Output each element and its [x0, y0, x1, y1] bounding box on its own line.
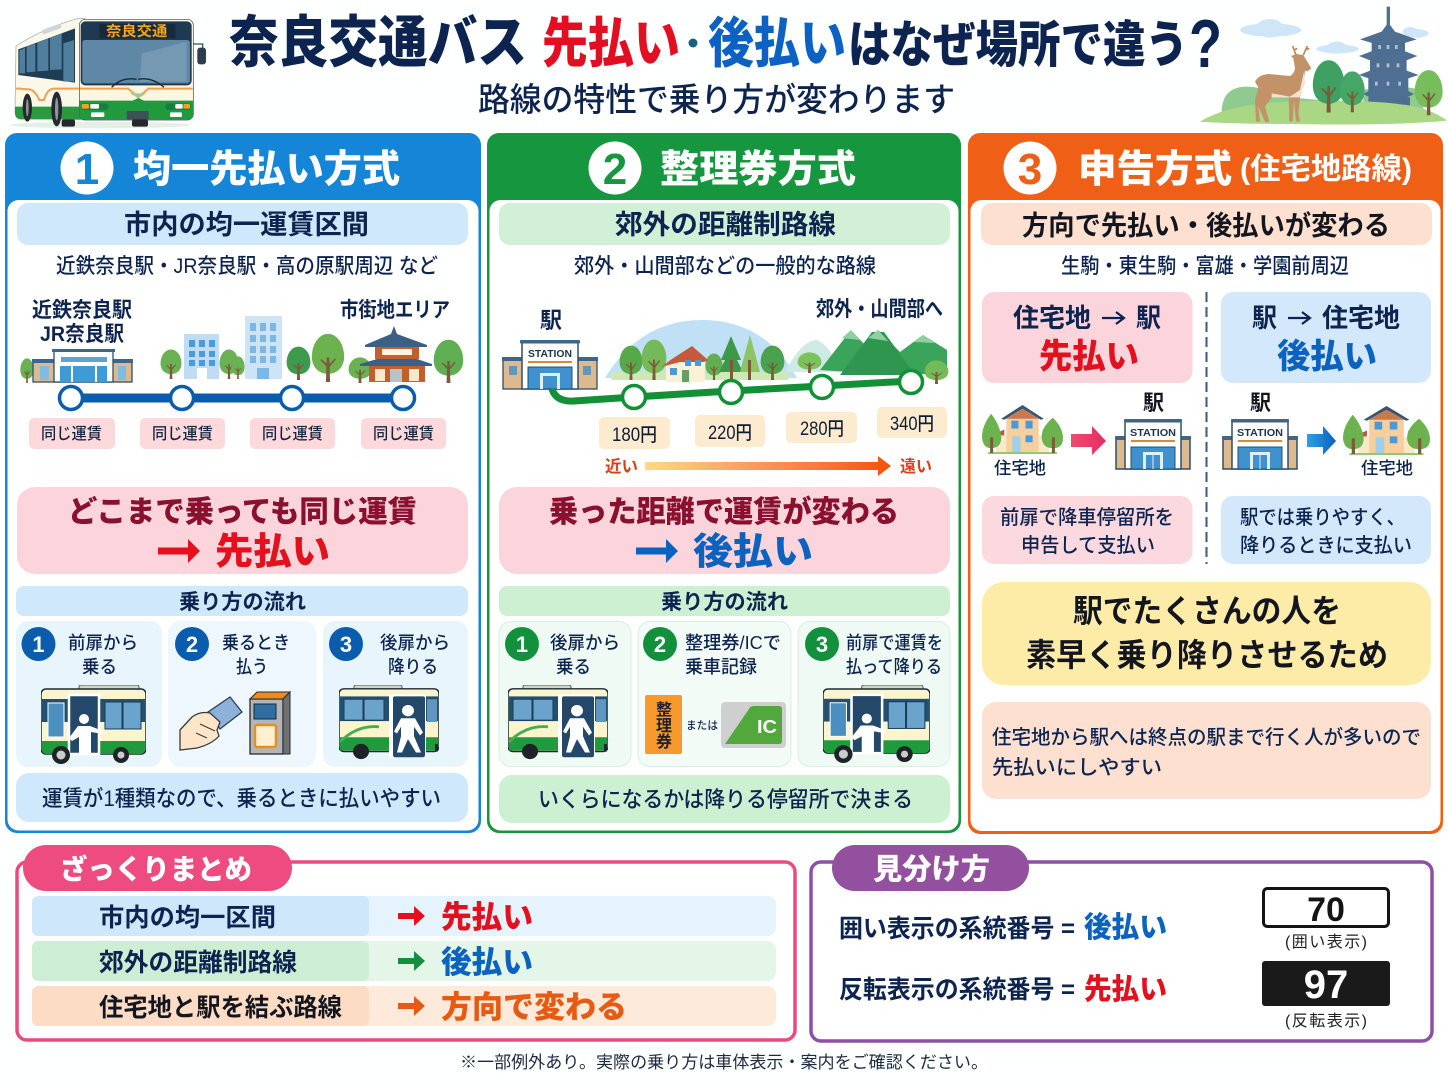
direction box: station to residential: 駅 — [1252, 303, 1277, 333]
panel 2 note — [499, 775, 950, 823]
explanation: pay when getting off — [1221, 496, 1431, 564]
sign: 70 outlined — [1264, 888, 1388, 951]
panel 2 frame and header — [487, 133, 961, 833]
panel 2 heading: 整理券方式 — [660, 149, 856, 191]
fare tags: 280円 — [800, 419, 844, 440]
panel 3 subheading: 方向で先払い・後払いが変わる — [1022, 210, 1390, 241]
step 2-2 record boarding with ticket or IC: 券 — [656, 733, 672, 751]
summary frame — [17, 862, 795, 1040]
panel 3 frame and header — [968, 133, 1443, 834]
direction box: residential to station: 先払い — [1039, 338, 1139, 376]
distance gradient arrow — [605, 456, 932, 476]
title: はなぜ場所で違う — [848, 17, 1188, 73]
panel 1 locations: 近鉄奈良駅・JR奈良駅・高の原駅周辺 など — [56, 254, 438, 278]
sign: 97 inverted: (反転表示) — [1285, 1012, 1367, 1030]
panel 3: declaration system — [968, 133, 1443, 834]
panel 1 station label — [32, 299, 132, 346]
step 1-1 board at front door: 1 — [32, 632, 45, 657]
sign: 70 outlined: 70 — [1307, 891, 1345, 929]
panel 1 frame and header — [5, 133, 481, 833]
illustration: station and city — [20, 316, 463, 383]
illustration: house to station: 駅 — [1143, 392, 1164, 415]
illustration: station to house: 住宅地 — [1361, 459, 1413, 478]
route line with fare stops — [552, 370, 922, 408]
sign: 97 inverted: 97 — [1304, 963, 1348, 1007]
panel 1 flow heading — [16, 586, 468, 616]
direction box: residential to station — [982, 292, 1192, 383]
illustration: house to station — [982, 392, 1191, 478]
panel 1: uniform prepayment — [5, 133, 481, 833]
panel 2 subheading — [499, 203, 950, 245]
panel 2 conclusion callout: 乗った距離で運賃が変わる — [549, 495, 899, 529]
panel 2: numbered ticket — [487, 133, 961, 833]
fare tags — [599, 407, 947, 449]
summary tab: ざっくりまとめ — [60, 853, 252, 885]
distance gradient arrow: 近い — [605, 457, 638, 476]
step 2-1 board at rear door: 後扉から — [550, 633, 620, 653]
explanation: pay when getting off: 駅では乗りやすく、 — [1240, 506, 1405, 529]
panel 3 subheading — [981, 203, 1432, 245]
step 2-2 record boarding with ticket or IC: 理 — [656, 718, 672, 735]
step 2-3 pay at front door and exit: 3 — [816, 632, 828, 657]
panel 3 yellow callout: 素早く乗り降りさせるため — [1026, 637, 1388, 673]
how to tell tab — [832, 845, 1029, 891]
summary row: suburban — [32, 941, 776, 981]
panel 2 subheading: 郊外の距離制路線 — [615, 210, 836, 240]
same fare tags: 同じ運賃 — [41, 425, 102, 443]
panel 1 station label: 近鉄奈良駅 — [32, 299, 132, 322]
step 2-2 record boarding with ticket or IC — [638, 622, 791, 766]
panel 2 locations: 郊外・山間部などの一般的な路線 — [574, 255, 876, 278]
step 1-1 board at front door — [16, 621, 162, 767]
panel 1 station label: JR奈良駅 — [40, 323, 124, 346]
fare tags: 220円 — [708, 423, 752, 444]
illustration: station — [502, 340, 598, 389]
panel 3 locations: 生駒・東生駒・富雄・学園前周辺 — [1061, 255, 1349, 278]
panel 1 heading: 均一先払い方式 — [133, 149, 400, 191]
step 1-3 exit at rear door: 後扉から — [380, 633, 450, 653]
same fare tags: 同じ運賃 — [152, 425, 213, 443]
illustration: station to house: 駅 — [1250, 392, 1271, 415]
panel 1 note — [16, 773, 468, 822]
summary row: residential: 方向で変わる — [441, 990, 627, 1025]
panel 1 flow heading: 乗り方の流れ — [179, 591, 306, 614]
panel 3 number badge — [1004, 142, 1056, 194]
illustration: station to house — [1222, 392, 1430, 478]
panel 1 number badge: 1 — [75, 145, 99, 194]
direction box: station to residential: 後払い — [1277, 338, 1377, 376]
same fare tags: 同じ運賃 — [373, 425, 434, 443]
how to tell panel — [811, 845, 1432, 1041]
illustration: house to station: STATION — [1130, 428, 1176, 439]
panel 1 conclusion callout — [17, 487, 468, 574]
summary row: city uniform: 先払い — [441, 900, 533, 935]
panel 1 body — [8, 200, 478, 830]
summary row: suburban: 郊外の距離制路線 — [99, 949, 297, 977]
panel 2 conclusion callout: 後払い — [693, 531, 813, 572]
panel 3 body — [970, 200, 1440, 831]
summary row: suburban: 後払い — [441, 945, 533, 980]
footnote: ※一部例外あり。実際の乗り方は車体表示・案内をご確認ください。 — [460, 1053, 988, 1072]
explanation: pay when getting off: 降りるときに支払い — [1240, 534, 1412, 557]
step 2-1 board at rear door — [499, 622, 631, 766]
step 2-2 record boarding with ticket or IC: IC — [757, 717, 777, 737]
step 1-2 pay when boarding: 2 — [186, 632, 198, 657]
header illustration: deer, pagoda and trees — [1200, 7, 1447, 125]
title — [229, 6, 1222, 82]
explanation: pay by declaring stop: 前扉で降車停留所を — [1000, 506, 1174, 529]
panel 1 city label: 市街地エリア — [340, 299, 450, 322]
direction box: station to residential: 住宅地 — [1322, 303, 1400, 333]
step 1-1 board at front door: 前扉から — [68, 633, 138, 653]
route line with stops — [60, 386, 414, 410]
panel 3 heading — [1078, 149, 1412, 191]
step 2-2 record boarding with ticket or IC: 整理券/ICで — [685, 633, 781, 653]
panel 2 number badge: 2 — [603, 145, 627, 194]
dashed divider — [1206, 292, 1208, 564]
panel 1 note: 運賃が1種類なので、乗るときに払いやすい — [42, 786, 441, 811]
explanation: pay by declaring stop: 申告して支払い — [1021, 534, 1155, 557]
rule: inverted number: 反転表示の系統番号 = — [839, 976, 1075, 1004]
direction box: residential to station: 駅 — [1136, 303, 1161, 333]
step 2-2 record boarding with ticket or IC: 2 — [654, 632, 666, 657]
panel 2 note: いくらになるかは降りる停留所で決まる — [538, 787, 913, 812]
panel 2 number badge — [588, 142, 642, 194]
summary panel — [17, 845, 795, 1040]
panel 2 conclusion callout — [499, 487, 950, 574]
fare tags: 340円 — [890, 414, 934, 435]
panel 3 number badge: 3 — [1018, 145, 1042, 194]
panel 2 flow heading: 乗り方の流れ — [661, 591, 788, 614]
same fare tags: 同じ運賃 — [262, 425, 323, 443]
title: 先払い — [542, 14, 680, 74]
step 2-3 pay at front door and exit: 払って降りる — [846, 657, 942, 677]
rule: inverted number: 先払い — [1084, 973, 1167, 1006]
direction box: residential to station: 住宅地 — [1013, 303, 1091, 333]
panel 1 conclusion callout: どこまで乗っても同じ運賃 — [68, 496, 417, 529]
subtitle: 路線の特性で乗り方が変わります — [478, 81, 955, 118]
step 2-1 board at rear door: 乗る — [556, 657, 591, 677]
panel 2 flow heading — [499, 586, 950, 616]
summary row: city uniform — [32, 896, 776, 936]
panel 3 note: 先払いにしやすい — [992, 756, 1162, 779]
title: 奈良交通バス — [229, 11, 527, 74]
step 1-1 board at front door: 乗る — [82, 657, 117, 677]
step 1-2 pay when boarding: 乗るとき — [222, 633, 290, 653]
summary tab — [23, 845, 292, 891]
title: ? — [1189, 6, 1222, 82]
step 1-3 exit at rear door: 降りる — [388, 657, 438, 677]
step 2-1 board at rear door: 1 — [516, 632, 528, 657]
direction box: station to residential — [1221, 292, 1431, 383]
rule: inverted number — [839, 973, 1167, 1006]
step 1-3 exit at rear door: 3 — [340, 632, 352, 657]
rule: outlined number: 後払い — [1084, 911, 1167, 944]
how to tell frame — [811, 862, 1432, 1041]
panel 2 body — [490, 200, 958, 830]
explanation: pay by declaring stop — [982, 496, 1192, 564]
how to tell tab: 見分け方 — [873, 853, 990, 886]
panel 3 heading: 申告方式 — [1078, 149, 1232, 191]
illustration: station to house: STATION — [1237, 428, 1283, 439]
panel 1 subheading: 市内の均一運賃区間 — [124, 210, 369, 240]
step 2-3 pay at front door and exit — [798, 622, 950, 766]
fare tags: 180円 — [612, 425, 657, 446]
step 2-2 record boarding with ticket or IC: 整 — [656, 701, 672, 719]
panel 3 note — [982, 702, 1431, 799]
step 1-2 pay when boarding: 払う — [236, 657, 268, 677]
summary row: residential — [32, 986, 776, 1026]
panel 3 yellow callout — [982, 582, 1431, 685]
panel 1 subheading — [17, 203, 468, 245]
header illustration: Nara Kotsu bus — [10, 18, 206, 128]
step 2-2 record boarding with ticket or IC: 乗車記録 — [685, 657, 757, 677]
summary row: city uniform: 市内の均一区間 — [99, 904, 276, 932]
sign: 97 inverted — [1262, 961, 1390, 1030]
illustration: suburban scenery — [605, 320, 948, 384]
header illustration: Nara Kotsu bus: 奈良交通 — [106, 23, 167, 39]
step 1-2 pay when boarding — [168, 621, 316, 767]
step 1-3 exit at rear door — [323, 621, 468, 767]
step 2-2 record boarding with ticket or IC: または — [686, 719, 718, 732]
panel 2 station label: 駅 — [540, 308, 562, 333]
rule: outlined number: 囲い表示の系統番号 = — [839, 915, 1075, 943]
panel 3 note: 住宅地から駅へは終点の駅まで行く人が多いので — [992, 726, 1421, 749]
title: 後払い — [708, 14, 846, 74]
step 2-3 pay at front door and exit: 前扉で運賃を — [846, 633, 943, 653]
illustration: house to station: 住宅地 — [994, 459, 1046, 478]
panel 1 conclusion callout: 先払い — [215, 531, 330, 572]
panel 2 suburb label: 郊外・山間部へ — [816, 298, 943, 321]
summary row: residential: 住宅地と駅を結ぶ路線 — [99, 994, 342, 1022]
illustration: station: STATION — [528, 348, 572, 360]
same fare tags — [29, 418, 446, 449]
panel 1 number badge — [60, 142, 114, 194]
panel 3 heading: (住宅地路線) — [1240, 153, 1412, 186]
rule: outlined number — [839, 911, 1167, 944]
panel 3 yellow callout: 駅でたくさんの人を — [1073, 593, 1341, 629]
sign: 70 outlined: (囲い表示) — [1285, 933, 1367, 951]
distance gradient arrow: 遠い — [900, 457, 932, 476]
